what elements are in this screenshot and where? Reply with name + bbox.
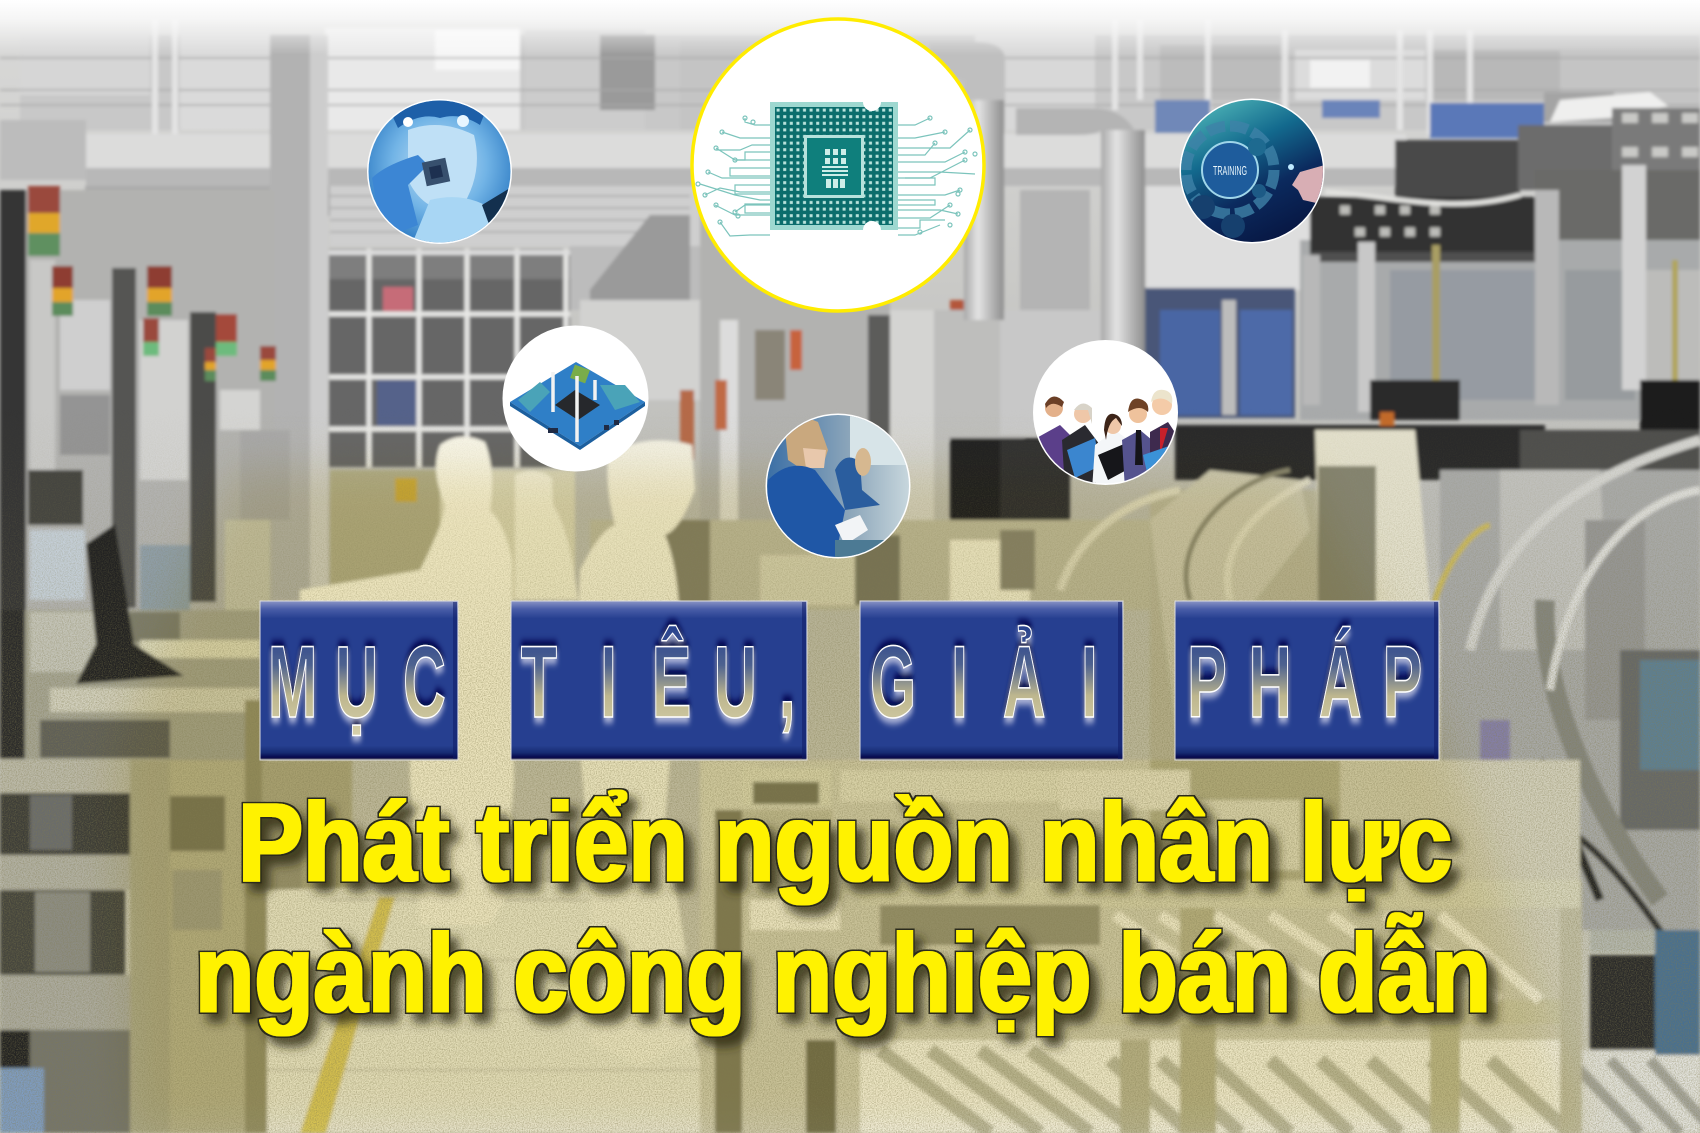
circle: business team (1033, 340, 1180, 490)
raised floor with yellow lines (267, 880, 752, 1133)
training label: TRAINING (1213, 163, 1247, 178)
signal towers (28, 186, 276, 381)
plaque: TIÊU,: TIÊU, (521, 625, 795, 739)
circuit traces right (898, 116, 977, 235)
right gantry frames (1300, 92, 1700, 420)
plaque: GIẢI (860, 601, 1123, 760)
pale machine tower and cream drum (1150, 430, 1480, 880)
centre tables and dark legs (700, 760, 1582, 1133)
monitor on the left workstation (76, 524, 184, 684)
centre machinery (570, 190, 1115, 610)
right wall and blue windows (1145, 186, 1316, 418)
title block: blue plaques (260, 601, 1439, 760)
horizontal beam (0, 120, 1406, 246)
chip package (770, 93, 898, 239)
headline line 1: Phát triển nguồn nhân lực (238, 780, 1452, 905)
plaque: MỤC: MỤC (268, 625, 446, 739)
white fade at top edge (0, 0, 1700, 55)
plaque: MỤC (260, 601, 458, 760)
dark machine row (1175, 380, 1700, 485)
upper-left column and equipment (0, 35, 328, 635)
plaque: PHÁP (1175, 601, 1439, 760)
film grain (0, 439, 1700, 1133)
circuit traces left (696, 116, 775, 236)
plaque: GIẢI: GIẢI (870, 624, 1098, 739)
ceiling windows and grid (0, 20, 1700, 180)
circle: technician at workbench (766, 413, 911, 559)
main circle: processor chip (692, 19, 984, 311)
shelving with bins (329, 249, 575, 605)
circle: circuit board (502, 326, 648, 472)
silver pipes (930, 42, 1145, 375)
plaque: PHÁP: PHÁP (1187, 625, 1422, 739)
lower-centre machinery band (590, 470, 1320, 790)
warm tint on the lower part of the photo (110, 470, 1590, 1133)
headline: yellow two-line title (195, 780, 1491, 1036)
headline line 2: ngành công nghiệp bán dẫn (195, 911, 1491, 1036)
circle: hand holding chip (367, 99, 512, 244)
plaque: TIÊU, (511, 601, 807, 760)
left shelving racks (0, 610, 352, 1133)
circle: training (1180, 98, 1325, 244)
right machines and cables (1430, 440, 1700, 1133)
cleanroom workers (300, 437, 700, 1065)
